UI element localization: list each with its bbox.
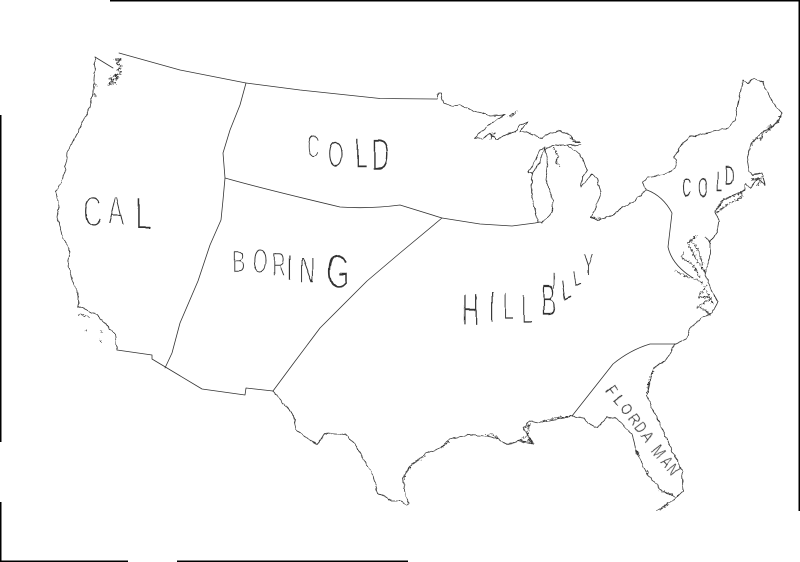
label: COLD north: L: [355, 131, 368, 178]
label: HILLBILLY: L: [572, 264, 583, 294]
boundary: California and the west: [165, 83, 246, 368]
label: BORING: I: [287, 247, 293, 289]
label: COLD north: D: [372, 129, 390, 180]
label: COLD northeast: C: [682, 171, 691, 203]
Lake Ontario and New England: [643, 78, 782, 344]
boundary: boring and hillbilly: [273, 218, 442, 391]
label: BORING: O: [252, 242, 267, 279]
Mexican border, Texas: [273, 391, 407, 505]
Outer Banks: [697, 285, 713, 315]
northern border: [119, 53, 437, 99]
Channel Islands: [78, 314, 103, 342]
handwritten region labels: [83, 128, 734, 481]
label: HILLBILLY: L: [521, 286, 533, 333]
Atlantic coast: [647, 344, 683, 511]
southwest border: [117, 350, 273, 395]
label: BORING: N: [299, 249, 315, 291]
Upper Michigan detail: [490, 132, 601, 219]
Florida and Gulf coast: [403, 416, 675, 505]
straight borders and region boundaries: [95, 53, 693, 416]
label: HILLBILLY: Y: [583, 250, 593, 283]
label: HILLBILLY: I: [489, 283, 495, 333]
boundary: northeast cold: [647, 190, 693, 278]
label: CAL: C: [83, 189, 102, 236]
label: HILLBILLY: L: [559, 271, 573, 309]
Pacific coast: [56, 57, 117, 350]
Puget Sound: [93, 59, 122, 97]
boundary: Florida man: [572, 344, 675, 416]
label: BORING: R: [272, 246, 286, 283]
boundary: northern cold and boring: [225, 178, 540, 226]
Long Island and Cape Cod: [715, 178, 762, 213]
dense coastline details: [78, 59, 781, 510]
label: COLD north: C: [307, 128, 320, 165]
Maine coast detail: [751, 116, 781, 145]
label: BORING: B: [232, 243, 245, 280]
Lake Michigan and Michigan shore: [528, 145, 646, 223]
label: COLD northeast: D: [725, 159, 734, 191]
Washington strait: [95, 57, 113, 68]
Chesapeake Bay: [675, 235, 705, 283]
label: FLORDA MAN: FLORDA MAN: [601, 382, 683, 481]
label: COLD northeast: O: [698, 171, 708, 203]
Florida coast: [637, 370, 672, 510]
Mississippi Delta: [486, 424, 533, 443]
label: HILLBILLY: L: [503, 283, 514, 329]
label: HILLBILLY: H: [462, 284, 479, 336]
label: HILLBILLY: I: [552, 268, 555, 293]
label: COLD north: O: [328, 134, 344, 176]
label: CAL: L: [135, 188, 152, 241]
label: CAL: A: [107, 188, 125, 235]
label: HILLBILLY: B: [541, 274, 556, 326]
label: COLD northeast: L: [716, 165, 723, 197]
label: BORING: G: [327, 246, 349, 299]
Isle Royale: [509, 111, 517, 117]
Lake Superior shore: [437, 93, 581, 142]
map outline of the contiguous United States: [56, 57, 782, 511]
Texas and Gulf coast: [403, 417, 568, 482]
